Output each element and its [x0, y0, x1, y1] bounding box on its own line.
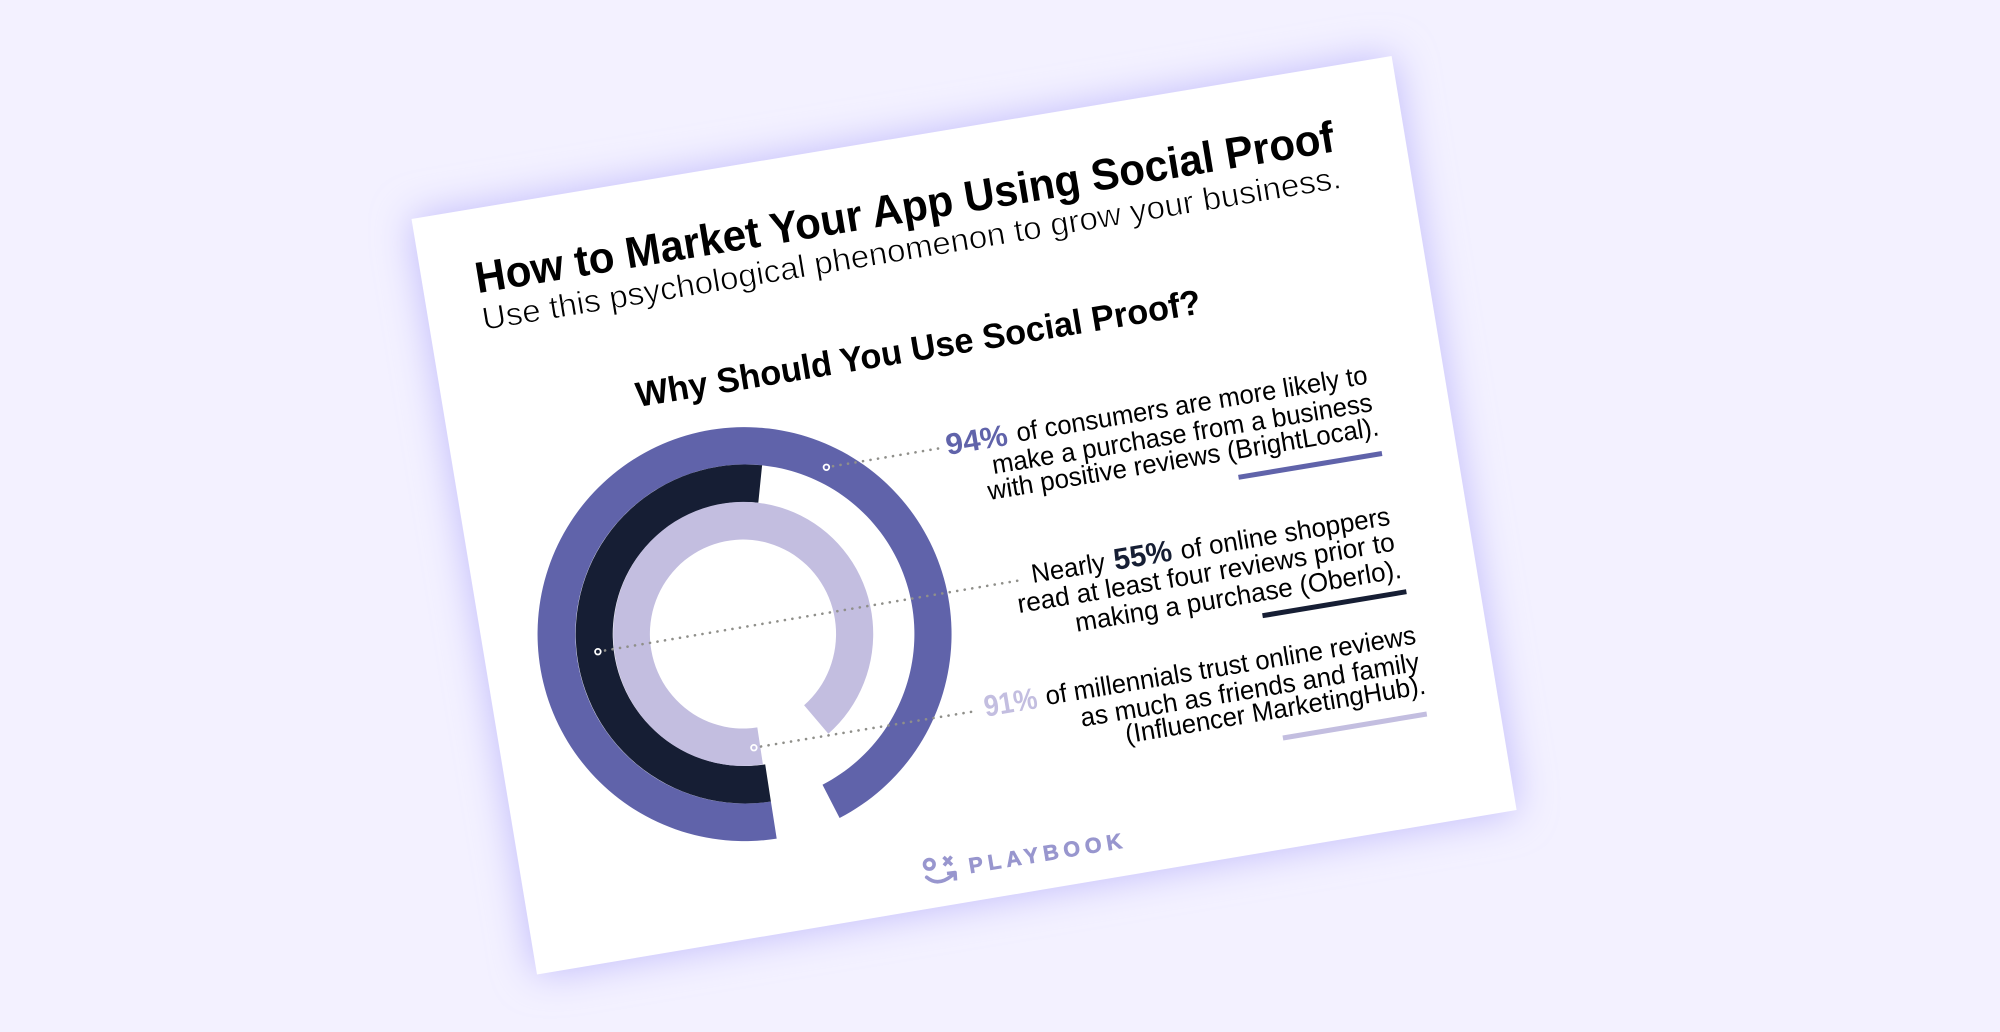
leader line: 94% — [824, 448, 940, 470]
panel: white tilted card — [412, 56, 1517, 974]
stat text: 91% of millennials: as much as friends and family — [1078, 647, 1422, 733]
outer ring 94% — [538, 427, 952, 841]
stat text: nearly 55% of online shoppers: Nearly — [1029, 547, 1108, 589]
stat text: 94% of consumers: with positive reviews (BrightLocal). — [984, 411, 1381, 506]
stat text: 94% of consumers — [943, 360, 1381, 506]
underline: 94% — [1238, 454, 1382, 477]
stat text: 91% of millennials — [981, 620, 1428, 749]
stat text: 94% of consumers: 94% — [943, 419, 1010, 462]
underline: 91% — [1283, 714, 1427, 738]
underline: 55% — [1262, 592, 1406, 616]
card shadow — [412, 56, 1517, 974]
stat text: nearly 55% of online shoppers — [1015, 501, 1403, 638]
leader line: 55% — [595, 580, 1022, 654]
icon: smiley face — [924, 856, 956, 882]
middle ring 55% — [576, 464, 771, 803]
stat text: nearly 55% of online shoppers: 55% — [1111, 535, 1174, 577]
stat text: 94% of consumers: make a purchase from a business — [990, 387, 1374, 480]
title: How to Market Your App Using Social Proof — [471, 113, 1338, 303]
section heading: Why Should You Use Social Proof? — [633, 283, 1204, 415]
leader line: 91% — [751, 711, 978, 750]
wordmark: PLAYBOOK — [967, 829, 1124, 878]
stat text: nearly 55% of online shoppers: read at least four reviews prior to — [1015, 527, 1397, 619]
stat text: 91% of millennials: of millennials trust online reviews — [1043, 620, 1418, 711]
inner ring 91% — [613, 502, 873, 766]
logo: Playbook — [924, 829, 1124, 882]
stat text: nearly 55% of online shoppers: making a purchase (Oberlo). — [1073, 554, 1403, 638]
subtitle: Use this psychological phenomenon to grow your business. — [479, 159, 1343, 337]
stat text: 94% of consumers: of consumers are more likely to — [1014, 360, 1370, 448]
stat text: nearly 55% of online shoppers: of online shoppers — [1178, 501, 1392, 565]
radial chart — [538, 427, 952, 841]
stat text: 91% of millennials: (Influencer MarketingHub). — [1123, 670, 1428, 749]
stat text: 91% of millennials: 91% — [981, 682, 1040, 724]
